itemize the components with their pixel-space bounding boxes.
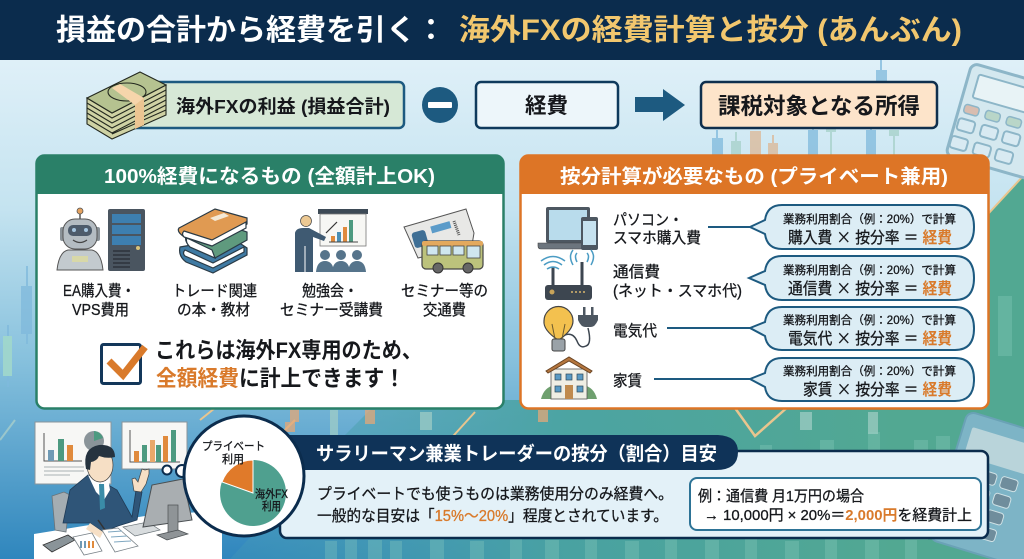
panel heading: 按分計算が必要なもの (プライベート兼用) xyxy=(560,165,948,188)
arrow xyxy=(635,89,685,121)
icon: calculator top right xyxy=(946,63,1024,191)
row label xyxy=(613,212,701,247)
formula bubble: electricity xyxy=(667,307,974,350)
icon: house xyxy=(541,357,597,399)
label: の本・教材 xyxy=(177,301,250,319)
panel heading xyxy=(520,155,989,194)
icon: money stack xyxy=(87,72,166,139)
guideline text: プライベートでも使うものは業務使用分のみ経費へ。 xyxy=(317,485,673,503)
guideline text xyxy=(317,485,673,525)
label xyxy=(280,282,383,319)
guideline heading: サラリーマン兼業トレーダーの按分（割合）目安 xyxy=(316,442,717,465)
formula bubble: electricity: 業務利用割合（例：20%）で計算 xyxy=(783,313,956,327)
callout text: これらは海外FX専用のため、 xyxy=(155,338,422,363)
formula bubble: electricity: 電気代 × 按分率 ＝ 経費 xyxy=(788,325,952,349)
formula bubble: PC: 業務利用割合（例：20%）で計算 xyxy=(783,212,956,226)
row label: (ネット・スマホ代) xyxy=(613,282,742,300)
formula: profit box: 海外FXの利益 (損益合計) xyxy=(176,96,390,117)
formula bubble: telecom: 業務利用割合（例：20%）で計算 xyxy=(783,263,956,277)
formula: taxable income box: 課税対象となる所得 xyxy=(718,94,920,119)
formula: expense box xyxy=(476,82,618,128)
icon: laptop and phone xyxy=(538,207,598,250)
example box: → 10,000円 × 20%＝2,000円を経費計上 xyxy=(704,507,972,524)
formula bubble: rent: 業務利用割合（例：20%）で計算 xyxy=(783,364,956,378)
row label: 電気代 xyxy=(613,322,657,340)
formula bubble: PC xyxy=(708,205,974,249)
label: セミナー受講費 xyxy=(280,301,383,319)
label xyxy=(172,282,257,319)
pie label: private: プライベート xyxy=(202,440,265,453)
pie label: FX xyxy=(255,487,288,513)
label: EA購入費・ xyxy=(63,282,135,300)
formula bubble: rent xyxy=(654,358,974,401)
formula: expense box: 経費 xyxy=(525,94,568,118)
formula bubble: PC: 購入費 × 按分率 ＝ 経費 xyxy=(788,224,952,248)
panel: 100% expenses xyxy=(36,155,504,408)
label: VPS費用 xyxy=(72,301,129,319)
title bar: 海外FXの経費計算と按分 (あんぶん) xyxy=(459,14,962,47)
panel: pro-rata expenses xyxy=(520,155,989,408)
row label: 家賃 xyxy=(613,372,642,390)
label xyxy=(63,282,135,319)
row label: スマホ購入費 xyxy=(613,229,701,247)
icon: wifi router xyxy=(541,250,594,300)
panel heading xyxy=(36,155,504,194)
label xyxy=(401,282,488,319)
example box: 例：通信費 月1万円の場合 xyxy=(698,488,864,505)
formula: profit box xyxy=(130,82,404,128)
thought bubble with pie chart xyxy=(162,416,304,536)
illustration: trader at desk xyxy=(34,422,222,559)
icon: robot and server xyxy=(57,208,145,271)
example box xyxy=(690,478,981,530)
icon: light bulb and plug xyxy=(544,306,598,351)
formula: taxable income box xyxy=(701,82,937,128)
formula bubble: telecom xyxy=(749,256,974,300)
pie label: private xyxy=(202,440,265,466)
panel heading: 100%経費になるもの (全額計上OK) xyxy=(104,165,435,188)
pie label: FX: 利用 xyxy=(262,500,281,513)
icon: check box xyxy=(102,344,145,384)
icon: books xyxy=(178,209,247,273)
guideline text: 一般的な目安は「15%〜20%」程度とされています。 xyxy=(317,507,668,525)
pie chart xyxy=(220,460,286,526)
guideline heading xyxy=(280,435,738,470)
label: セミナー等の xyxy=(401,282,488,300)
minus sign xyxy=(422,87,458,123)
formula bubble: telecom: 通信費 × 按分率 ＝ 経費 xyxy=(788,275,952,299)
pie label: private: 利用 xyxy=(222,453,244,466)
title bar xyxy=(0,0,1024,60)
icon: calculator bottom right xyxy=(929,411,1024,559)
panel: guideline xyxy=(280,435,988,538)
label: トレード関連 xyxy=(172,282,257,300)
callout text: 全額経費に計上できます！ xyxy=(156,366,405,391)
title bar: 損益の合計から経費を引く： xyxy=(56,14,446,47)
label: 勉強会・ xyxy=(302,282,358,300)
row label xyxy=(613,263,742,300)
row label: 通信費 xyxy=(613,263,660,281)
callout text xyxy=(155,338,422,391)
formula bubble: rent: 家賃 × 按分率 ＝ 経費 xyxy=(803,376,952,400)
icon: ticket and bus xyxy=(404,209,483,273)
pie label: FX: 海外FX xyxy=(255,487,288,501)
icon: seminar presenter xyxy=(295,209,368,272)
row label: パソコン・ xyxy=(613,212,683,229)
label: 交通費 xyxy=(423,301,466,319)
